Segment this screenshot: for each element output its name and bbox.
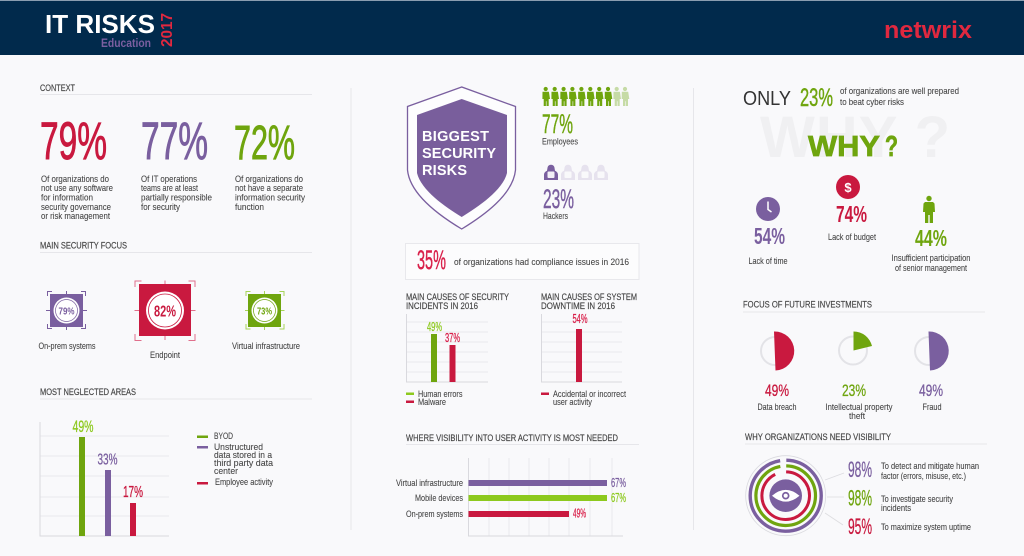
bar chart: visibility by area: On-prem systems [406, 509, 463, 519]
reason: lack of budget [828, 175, 876, 242]
icon: clock [756, 197, 780, 221]
reason: senior management: 44% [915, 225, 947, 251]
legend: security incidents [406, 389, 463, 407]
pie: intellectual property theft: 23% [842, 381, 866, 400]
panel: causes of security incidents [406, 292, 509, 407]
label: on-prem systems: On-prem systems [38, 341, 96, 351]
bar chart: visibility by area: Mobile devices [415, 493, 463, 503]
pie: data breach: Data breach [758, 402, 796, 412]
bar chart: visibility by area: 49% [573, 506, 586, 520]
stat: 77% employees: 77% [542, 109, 573, 139]
icon: endpoint 82% [134, 280, 196, 340]
shield text: SECURITY [422, 146, 496, 162]
icon: endpoint 82%: 82% [154, 304, 176, 320]
shield text: RISKS [422, 163, 467, 179]
callout: compliance issues: 35% [417, 245, 446, 275]
icon: hacker pictogram row [544, 165, 608, 180]
stat: 77%: for security [141, 202, 180, 212]
pie: intellectual property theft: theft [849, 411, 865, 421]
heading: where visibility is needed: WHERE VISIBILITY INTO USER ACTIVITY IS MOST NEEDED [406, 433, 618, 443]
bar chart: visibility by area: 67% [611, 475, 626, 490]
reason: senior management [892, 196, 970, 273]
panel: most neglected areas [40, 387, 312, 536]
heading: context: CONTEXT [40, 83, 76, 93]
bar chart: security incidents: 49% [427, 319, 442, 334]
reason: senior management: Insufficient participation [892, 253, 970, 263]
heading: why organizations need visibility: WHY ORGANIZATIONS NEED VISIBILITY [745, 432, 891, 442]
pie: intellectual property theft: Intellectual property [826, 402, 893, 412]
icon: shield [408, 87, 516, 229]
stat: 23%: 23% [800, 84, 833, 112]
reason: lack of budget: 74% [836, 201, 867, 227]
radial chart: eye rings [746, 456, 844, 536]
pie: fraud [915, 331, 949, 412]
heading: causes of system downtime [541, 292, 637, 311]
heading: causes of system downtime: DOWNTIME IN 2016 [541, 301, 615, 311]
heading: WHY?: WHY [808, 131, 880, 163]
stat: 72% [234, 117, 305, 212]
panel: where visibility is needed [396, 433, 639, 536]
legend: system downtime: user activity [553, 397, 592, 407]
reason: senior management: of senior management [895, 263, 967, 273]
reason: maximize uptime: To maximize system uptime [881, 522, 971, 532]
shield text [422, 129, 496, 179]
stat: 79%: or risk management [41, 211, 110, 221]
heading: causes of security incidents: MAIN CAUSES OF SECURITY [406, 292, 509, 302]
bar chart: security incidents [406, 314, 488, 382]
reason: maximize uptime: 95% [848, 514, 872, 539]
label: endpoint: Endpoint [150, 350, 180, 360]
text: well prepared: to beat cyber risks [840, 97, 904, 107]
stat: 77%: 77% [141, 112, 208, 171]
heading: causes of security incidents: INCIDENTS IN 2016 [406, 301, 478, 311]
panel: causes of system downtime [541, 292, 637, 407]
legend: neglected areas: Employee activity [215, 477, 273, 487]
callout: compliance issues [406, 244, 639, 280]
bar chart: visibility by area [396, 458, 626, 536]
stat: 77% employees: Employees [542, 136, 578, 146]
stat: 72%: information security [235, 192, 305, 202]
bar chart: neglected areas [40, 417, 169, 536]
heading: most neglected areas: MOST NEGLECTED AREAS [40, 387, 136, 397]
header banner [0, 0, 1024, 55]
bar chart: system downtime: 54% [572, 311, 588, 326]
stat: 79%: for information [41, 192, 93, 202]
legend: neglected areas: center [214, 466, 238, 476]
bar chart: security incidents: 37% [445, 330, 460, 345]
reason: lack of budget: Lack of budget [828, 232, 876, 242]
logo: netwrix: netwrix [884, 17, 973, 44]
stat: 72%: 72% [234, 117, 295, 170]
icon: virtual infrastructure 73% [245, 291, 284, 330]
icon: eye [772, 490, 800, 502]
stat: 79%: not use any software [41, 183, 113, 193]
year: 2017: 2017 [159, 13, 176, 47]
legend: system downtime [541, 389, 626, 407]
stat: 79%: 79% [40, 112, 107, 171]
panel: focus of future investments [743, 300, 985, 421]
reason: lack of time: Lack of time [748, 256, 788, 266]
stat: 72%: function [235, 202, 264, 212]
callout: compliance issues: of organizations had compliance issues in 2016 [454, 257, 629, 267]
reason: investigate incidents: incidents [881, 503, 911, 513]
heading: causes of system downtime: MAIN CAUSES OF SYSTEM [541, 292, 637, 302]
reason: maximize uptime [848, 514, 971, 539]
background text: WHY ?: WHY ? [760, 105, 950, 170]
legend: neglected areas [197, 431, 274, 487]
subtitle: Education: Education [101, 38, 151, 50]
reason: investigate incidents: 98% [848, 486, 872, 510]
bar chart: neglected areas: 49% [72, 417, 94, 436]
icon: on-prem systems 79%: 79% [58, 306, 75, 318]
reason: detect and mitigate [848, 457, 979, 482]
heading: WHY?: ? [885, 131, 898, 163]
stat: 72%: Of organizations do [235, 174, 303, 184]
icon: on-prem systems 79% [46, 291, 87, 330]
reason: detect and mitigate: To detect and mitigate human [881, 461, 979, 471]
stat: 77% [141, 112, 212, 212]
icon: dollar: $ [844, 180, 852, 195]
reason: detect and mitigate: 98% [848, 457, 872, 482]
panel: only 23% well prepared [743, 84, 959, 170]
bar chart: neglected areas: 17% [123, 484, 143, 501]
title: IT RISKS: IT RISKS [45, 9, 155, 39]
heading: focus of future investments: FOCUS OF FUTURE INVESTMENTS [743, 300, 872, 310]
stat: 79% [40, 112, 113, 221]
text: well prepared [840, 86, 959, 107]
stat: 23% hackers [543, 184, 574, 221]
reason: lack of time [748, 197, 788, 266]
stat: 77%: teams are at least [141, 183, 198, 193]
stat: 77%: partially responsible [141, 192, 212, 202]
reason: detect and mitigate: factor (errors, misuse, etc.) [881, 471, 966, 481]
pie: intellectual property theft [826, 331, 893, 421]
pie: fraud: Fraud [922, 402, 942, 412]
legend: neglected areas: BYOD [214, 431, 233, 441]
icon: virtual infrastructure 73%: 73% [257, 306, 272, 318]
bar chart: neglected areas: 33% [98, 452, 118, 468]
reason: investigate incidents: To investigate security [881, 494, 953, 504]
icon: businessman [923, 196, 935, 223]
pie: fraud: 49% [919, 381, 943, 400]
panel: biggest security risks [408, 87, 629, 229]
icon: employee pictogram row [542, 87, 629, 106]
heading: causes of security incidents [406, 292, 509, 311]
pie: data breach [758, 331, 796, 412]
text: ONLY: ONLY [743, 88, 791, 110]
legend: neglected areas: data stored in a [214, 450, 273, 460]
text: well prepared: of organizations are well prepared [840, 86, 959, 96]
stat: 79%: security governance [41, 202, 111, 212]
stat: 23% hackers: 23% [543, 184, 574, 214]
legend: system downtime: Accidental or incorrect [553, 389, 626, 399]
label: virtual infrastructure: Virtual infrastructure [232, 341, 300, 351]
panel: why organizations need visibility [745, 432, 987, 539]
panel: main security focus [38, 240, 312, 360]
panel: context [40, 83, 312, 221]
stat: 77% employees [542, 109, 578, 146]
stat: 77%: Of IT operations [141, 174, 197, 184]
legend: neglected areas: third party data [214, 458, 274, 468]
stat: 72%: not have a separate [235, 183, 303, 193]
heading: main security focus: MAIN SECURITY FOCUS [40, 240, 127, 250]
stat: 23% hackers: Hackers [543, 211, 568, 221]
bar chart: visibility by area: Virtual infrastructure [396, 478, 463, 488]
reason: lack of time: 54% [754, 223, 785, 249]
bar chart: visibility by area: 67% [611, 490, 626, 505]
legend: security incidents: Human errors [418, 389, 463, 399]
legend: neglected areas: Unstructured [214, 442, 263, 452]
stat: 79%: Of organizations do [41, 174, 109, 184]
shield text: BIGGEST [422, 129, 489, 145]
pie: data breach: 49% [765, 381, 789, 400]
reason: investigate incidents [848, 486, 953, 513]
legend: security incidents: Malware [418, 397, 446, 407]
